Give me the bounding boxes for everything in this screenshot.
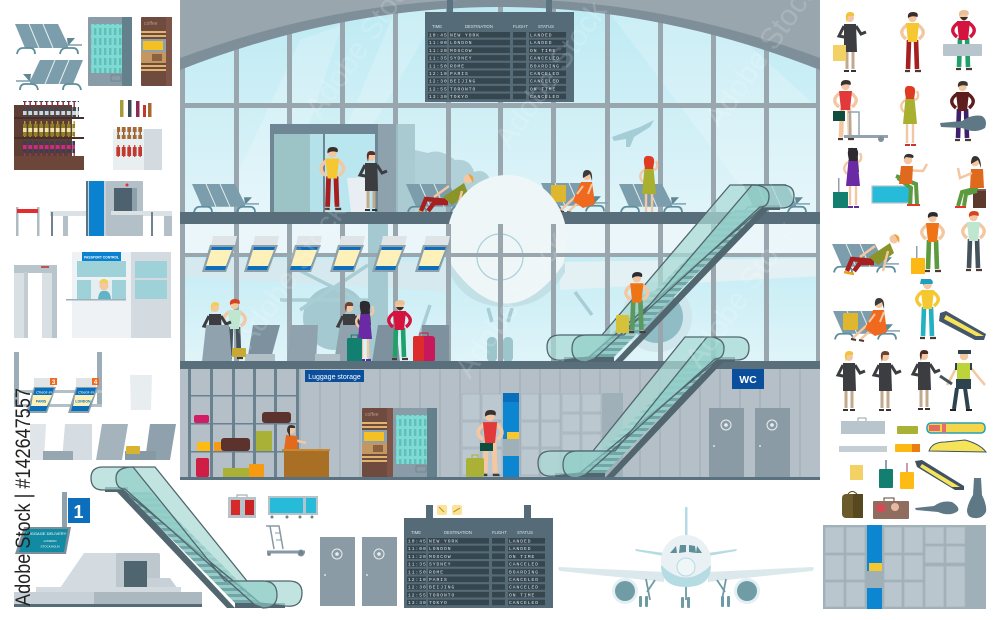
seated woman <box>541 170 608 213</box>
departures board, bottom: BEIJING <box>429 585 455 591</box>
stored bags <box>194 412 291 477</box>
bald man in red <box>389 300 410 359</box>
bottom doors <box>320 537 397 606</box>
sleeping man <box>832 234 899 274</box>
attendants behind desks <box>204 302 365 361</box>
clerk <box>282 425 330 477</box>
woman with shopping bag <box>833 12 866 71</box>
main airport cross-section <box>180 0 824 480</box>
lockers in scene <box>462 393 623 477</box>
departures board, bottom: LONDON <box>429 546 452 552</box>
shopping bag <box>850 465 863 480</box>
departures board, upper floor <box>425 12 574 102</box>
departures board, upper floor: 11:35 <box>429 56 448 62</box>
WC sign <box>732 369 764 389</box>
departures board, upper floor: BEIJING <box>450 79 476 85</box>
rope barrier <box>16 207 40 236</box>
long ski bag <box>915 460 964 490</box>
departures board, bottom: LANDED <box>509 538 532 544</box>
man with cart <box>833 80 888 142</box>
man in orange with suitcase <box>911 212 943 274</box>
departures board, upper floor: LONDON <box>450 40 473 46</box>
aircraft top seen through window <box>447 175 567 305</box>
departures board, upper floor: TOKYO <box>450 94 469 100</box>
guitar case flat <box>915 502 958 514</box>
departures board, upper floor: 11:20 <box>429 48 448 54</box>
bottom rail <box>180 477 820 480</box>
baggage sign post <box>62 492 67 528</box>
seated woman with bench <box>833 298 900 341</box>
passport control booth <box>66 252 171 338</box>
green pouch <box>897 426 918 434</box>
red suitcase <box>413 333 435 362</box>
slim silver case <box>839 446 887 452</box>
large locker bank <box>823 525 986 609</box>
departures board, bottom: BOARDING <box>509 569 539 575</box>
plane in the sky <box>612 120 654 147</box>
departures board, upper floor: ON TIME <box>530 48 556 54</box>
woman with red hair <box>640 156 657 215</box>
passport sign: PASSPORT CONTROL <box>84 256 119 260</box>
man with red shirt at lockers <box>478 410 502 475</box>
silver case <box>841 418 885 434</box>
check-in screens <box>202 236 450 272</box>
drinks machine <box>393 408 437 477</box>
bald man with case <box>943 10 982 69</box>
faint stock watermarks: Adobe Stock <box>229 195 354 354</box>
departures board, upper floor: 13:30 <box>429 94 448 100</box>
woman with purple dress <box>833 148 861 208</box>
floor slab 1 <box>180 212 820 224</box>
flight board hangers <box>447 0 552 13</box>
departures board, bottom: 12:10 <box>408 577 427 583</box>
departures board, upper floor: 12:30 <box>429 79 448 85</box>
departures board, bottom: 11:35 <box>408 562 427 568</box>
departures board, bottom: ON TIME <box>509 592 535 598</box>
bottle shelf <box>14 101 84 170</box>
ground floor wall <box>180 369 820 477</box>
guitar case upright <box>967 478 986 518</box>
luggage delivery screen <box>15 527 71 554</box>
departures board, upper floor: 11:00 <box>429 40 448 46</box>
suitcase on escalator <box>616 315 629 333</box>
light check-in desks <box>30 424 92 460</box>
waiting benches, upper floor <box>192 184 810 212</box>
check-in counter kit: Check-in <box>78 390 95 394</box>
ski bag flat <box>929 440 986 452</box>
departures board, bottom: 10:45 <box>408 538 427 544</box>
luggage delivery screen: LUGGAGE DELIVERY <box>26 531 67 536</box>
check-in counter kit: LONDON <box>75 400 91 404</box>
glass door enclosure <box>270 124 415 212</box>
woman phone <box>901 86 918 145</box>
passenger at check-in desk <box>224 299 245 358</box>
lower escalator <box>538 337 749 478</box>
departures board, upper floor: CANCELED <box>530 56 560 62</box>
man on escalator <box>626 272 648 332</box>
dark check-in desks <box>96 424 176 460</box>
departures board, bottom: LANDED <box>509 546 532 552</box>
pale divider panel <box>130 375 152 410</box>
man in yellow shirt <box>321 147 344 209</box>
check-in counter kit: 3 <box>52 380 56 386</box>
departures board, upper floor: NEW YORK <box>450 32 480 38</box>
floor slab 2 <box>180 361 820 369</box>
upper floor glass wall <box>180 0 820 305</box>
luggage cart <box>266 526 305 556</box>
bottom flight board hangers and icons <box>426 505 531 518</box>
woman in purple dress <box>356 301 373 360</box>
right column luggage <box>839 418 986 519</box>
luggage delivery screen: STOCKHOLM <box>41 544 60 548</box>
WC sign: WC <box>739 374 757 386</box>
departures board, bottom: 11:50 <box>408 569 427 575</box>
check-in desks <box>202 325 449 362</box>
left column items <box>14 17 202 607</box>
departures board, bottom: 13:30 <box>408 600 427 606</box>
departures board, upper floor: 10:45 <box>429 32 448 38</box>
departures board, upper floor: PARIS <box>450 71 469 77</box>
departures board, upper floor: CANCELED <box>530 94 560 100</box>
departures board, bottom: 12:30 <box>408 585 427 591</box>
departures board, upper floor: TIME <box>432 24 442 29</box>
man sitting on case <box>872 154 927 205</box>
faint stock watermarks: Adobe Stock <box>489 0 614 154</box>
bench top <box>15 24 82 54</box>
faint stock watermarks <box>229 0 824 384</box>
departures board, bottom: SYDNEY <box>429 562 452 568</box>
check-in counter kit: PARIS <box>36 400 47 404</box>
free-standing escalator <box>91 467 302 608</box>
departures board, upper floor: MOSCOW <box>450 48 473 54</box>
check-in counter kit <box>14 352 102 413</box>
departures board, bottom: 11:20 <box>408 554 427 560</box>
yellow suitcase <box>900 463 914 489</box>
departures board, upper floor: CANCELED <box>530 71 560 77</box>
drinks vending machine <box>88 17 132 86</box>
gate 1 sign <box>68 498 90 523</box>
departures board, upper floor: ROME <box>450 63 465 69</box>
snowboard case <box>927 423 985 433</box>
brown luggage <box>464 201 489 212</box>
departures board, bottom: TIME <box>411 530 421 535</box>
man's shorts and case <box>466 443 493 477</box>
departures board, bottom: PARIS <box>429 577 448 583</box>
vertical stock id text: Adobe Stock | #142647557 <box>12 388 35 606</box>
departures board, upper floor: CANCELED <box>530 79 560 85</box>
departures board, upper floor: 12:55 <box>429 86 448 92</box>
gate 1 sign: 1 <box>73 502 84 522</box>
departures board, bottom: CANCELED <box>509 562 539 568</box>
departures board, upper floor: 12:10 <box>429 71 448 77</box>
teal suitcase <box>879 460 893 488</box>
departures board, upper floor: ON TIME <box>530 86 556 92</box>
sleeping passenger <box>406 174 473 214</box>
departures board, bottom: MOSCOW <box>429 554 452 560</box>
red metal case <box>228 495 256 518</box>
yellow case at scale <box>232 348 246 357</box>
luggage delivery screen: LONDON <box>44 539 56 543</box>
departures board, bottom: NEW YORK <box>429 538 459 544</box>
roof arch <box>180 0 820 70</box>
orange pouch <box>895 444 920 452</box>
metal detector <box>14 265 57 338</box>
departures board, bottom: 11:00 <box>408 546 427 552</box>
blue equipment case <box>268 496 318 518</box>
faint stock watermarks: Adobe Stock <box>679 215 804 374</box>
departures board, upper floor: LANDED <box>530 40 553 46</box>
check-in counter kit: 4 <box>94 380 98 386</box>
teal suitcase <box>347 335 362 362</box>
man on stool <box>955 156 986 208</box>
police officer <box>940 350 985 410</box>
man from behind <box>963 211 984 270</box>
departures board, bottom: CANCELED <box>509 585 539 591</box>
luggage storage sign <box>305 370 364 382</box>
departures board, upper floor: BOARDING <box>530 63 560 69</box>
aircraft seen through window <box>180 175 820 362</box>
trees behind the glass <box>415 125 490 212</box>
airplane front view <box>558 507 814 608</box>
departures board, upper floor: 11:50 <box>429 63 448 69</box>
departures board, upper floor: TORONTO <box>450 86 476 92</box>
departures board, bottom: TOKYO <box>429 600 448 606</box>
departures board, upper floor: STATUS <box>538 24 554 29</box>
departures board, bottom: 12:55 <box>408 592 427 598</box>
departures board, upper floor: LANDED <box>530 32 553 38</box>
right column characters <box>832 10 986 410</box>
bench bottom <box>16 60 83 90</box>
toilet doors <box>709 408 790 477</box>
departures board, bottom: STATUS <box>517 530 533 535</box>
departures board, bottom: CANCELED <box>509 600 539 606</box>
coffee vending machine <box>141 17 172 86</box>
attendant behind counter <box>360 151 387 210</box>
faint stock watermarks: Adobe Stock <box>449 225 574 384</box>
departures board, bottom: TORONTO <box>429 592 455 598</box>
counter <box>347 177 370 212</box>
departures board, bottom: DESTINATION <box>444 530 472 535</box>
departures board, upper floor: FLIGHT <box>513 24 528 29</box>
departures board, bottom <box>404 518 553 608</box>
departures board, bottom: FLIGHT <box>492 530 507 535</box>
luggage storage rack <box>188 369 299 477</box>
brown backpack <box>842 492 863 518</box>
check-in counter kit: Check-in <box>36 390 53 394</box>
middle floor glass wall <box>180 175 820 362</box>
baggage carousel <box>14 553 202 607</box>
man in yellow <box>902 12 923 71</box>
departures board, bottom: CANCELED <box>509 577 539 583</box>
small fridge with bottles <box>113 100 162 170</box>
departures board, upper floor: DESTINATION <box>465 24 493 29</box>
man in hat <box>917 279 938 338</box>
brown suitcase <box>873 498 909 519</box>
departures board, bottom: ON TIME <box>509 554 535 560</box>
departures board, bottom: ROME <box>429 569 444 575</box>
upper escalator <box>547 185 794 362</box>
man with guitar case <box>940 81 986 140</box>
coffee machine <box>362 408 393 477</box>
departures board, upper floor: SYDNEY <box>450 56 473 62</box>
security scanner <box>50 181 172 236</box>
ski bag <box>939 311 986 340</box>
flight attendants <box>838 350 940 410</box>
luggage storage sign: Luggage storage <box>308 374 361 381</box>
